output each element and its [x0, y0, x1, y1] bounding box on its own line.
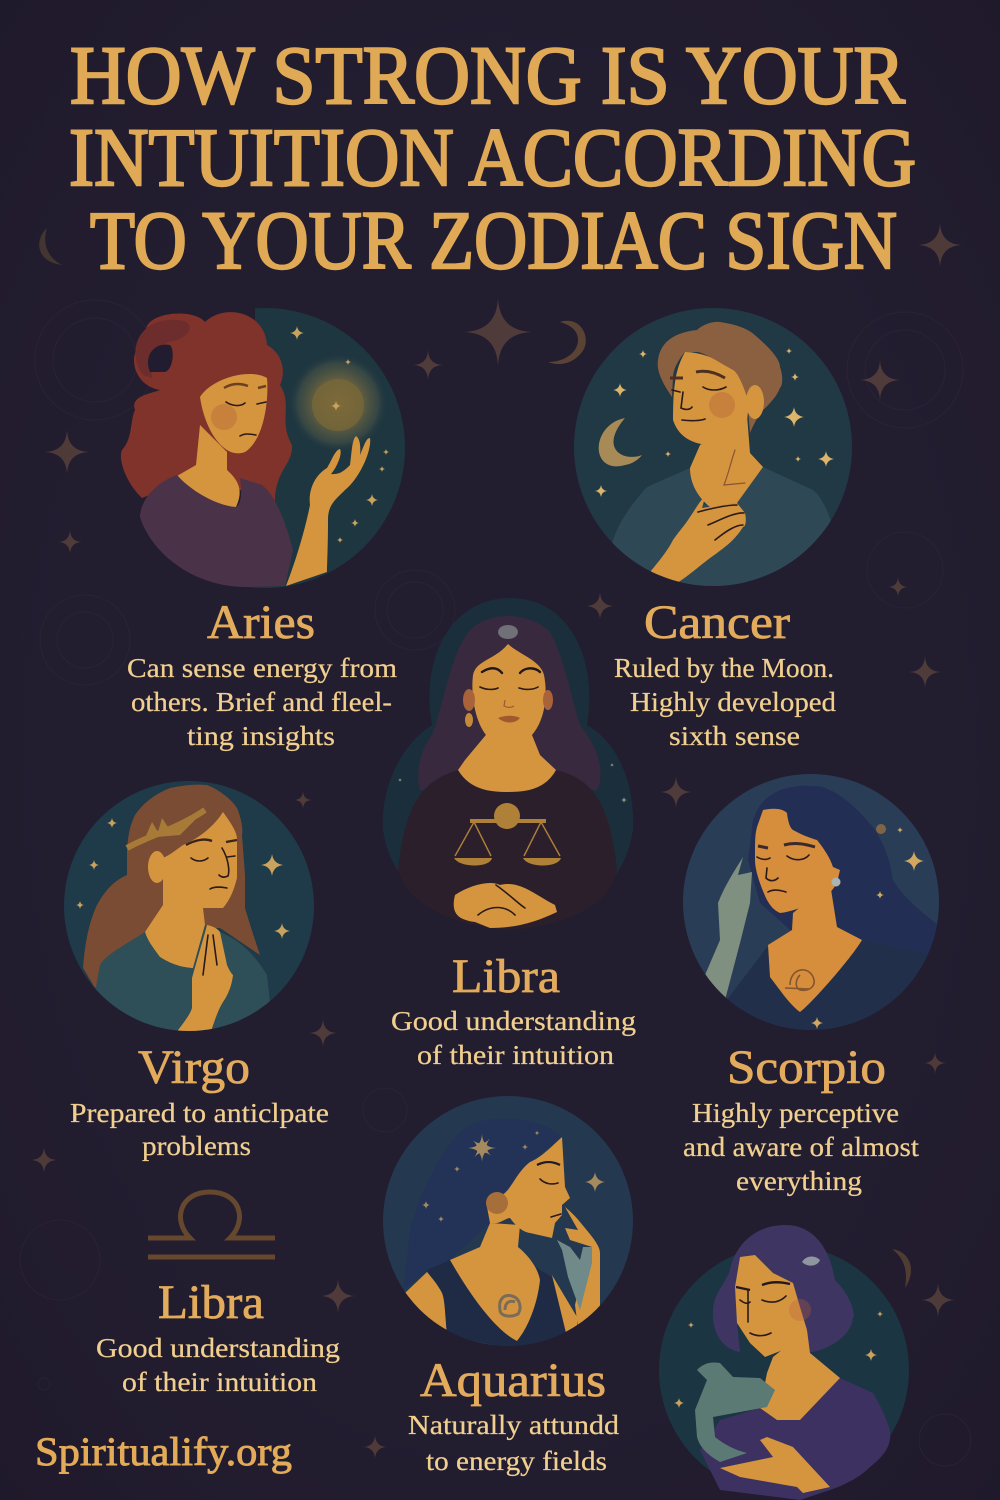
panel: cancer	[574, 308, 852, 751]
title: HOW STRONG IS YOUR	[70, 29, 906, 121]
heading: libra: Libra	[452, 950, 560, 1003]
text: scorpio description: and aware of almost	[683, 1132, 920, 1162]
portrait: libra woman with scales	[383, 598, 633, 930]
title: INTUITION ACCORDING	[69, 111, 916, 203]
portrait: aquarius woman in profile	[383, 1096, 633, 1350]
text: aries description	[127, 653, 397, 751]
text: scorpio description	[683, 1098, 920, 1196]
text: aquarius description	[408, 1410, 620, 1476]
panel: libra secondary	[96, 1192, 340, 1397]
text: aries description: ting insights	[187, 721, 335, 751]
text: scorpio description: Highly perceptive	[692, 1098, 899, 1128]
panel: scorpio	[683, 774, 945, 1196]
heading: aquarius: Aquarius	[420, 1354, 606, 1407]
text: virgo description: Prepared to anticlpate	[70, 1098, 329, 1128]
text: libra description: of their intuition	[417, 1040, 615, 1070]
panel: aquarius	[383, 1096, 633, 1476]
text: libra description: Good understanding	[391, 1006, 636, 1036]
text: aquarius description: Naturally attundd	[408, 1410, 620, 1440]
text: cancer description: Highly developed	[630, 687, 837, 717]
text: libra description: of their intuition	[122, 1367, 318, 1397]
title	[69, 29, 916, 286]
text: aquarius description: to energy fields	[426, 1446, 607, 1476]
heading: libra: Libra	[158, 1276, 264, 1329]
panel: virgo	[64, 781, 329, 1161]
panel: aries	[121, 300, 415, 751]
heading: virgo: Virgo	[138, 1041, 250, 1094]
text: libra description	[96, 1333, 340, 1397]
icon: libra symbol	[148, 1192, 275, 1257]
text: libra description	[391, 1006, 636, 1070]
text: libra description: Good understanding	[96, 1333, 340, 1363]
text: cancer description	[614, 653, 837, 751]
text: aries description: Can sense energy from	[127, 653, 397, 683]
portrait: aries woman with glowing orb	[121, 300, 415, 600]
title: TO YOUR ZODIAC SIGN	[90, 194, 897, 286]
heading: scorpio: Scorpio	[727, 1041, 886, 1094]
heading: cancer: Cancer	[644, 596, 790, 649]
text: virgo description: problems	[142, 1131, 251, 1161]
text: aries description: others. Brief and fleel-	[131, 687, 392, 717]
portrait: cancer person with moon	[574, 308, 852, 600]
heading: aries: Aries	[207, 596, 315, 649]
text: virgo description	[70, 1098, 329, 1161]
brand: Spiritualify.org: Spiritualify.org	[35, 1429, 292, 1474]
panel: pisces portrait with fish	[659, 1225, 909, 1500]
text: cancer description: sixth sense	[669, 721, 800, 751]
portrait: scorpio woman	[683, 774, 945, 1040]
portrait: virgo woman praying	[64, 781, 314, 1040]
text: scorpio description: everything	[736, 1166, 862, 1196]
panel: libra center	[383, 598, 636, 1070]
text: cancer description: Ruled by the Moon.	[614, 653, 834, 683]
